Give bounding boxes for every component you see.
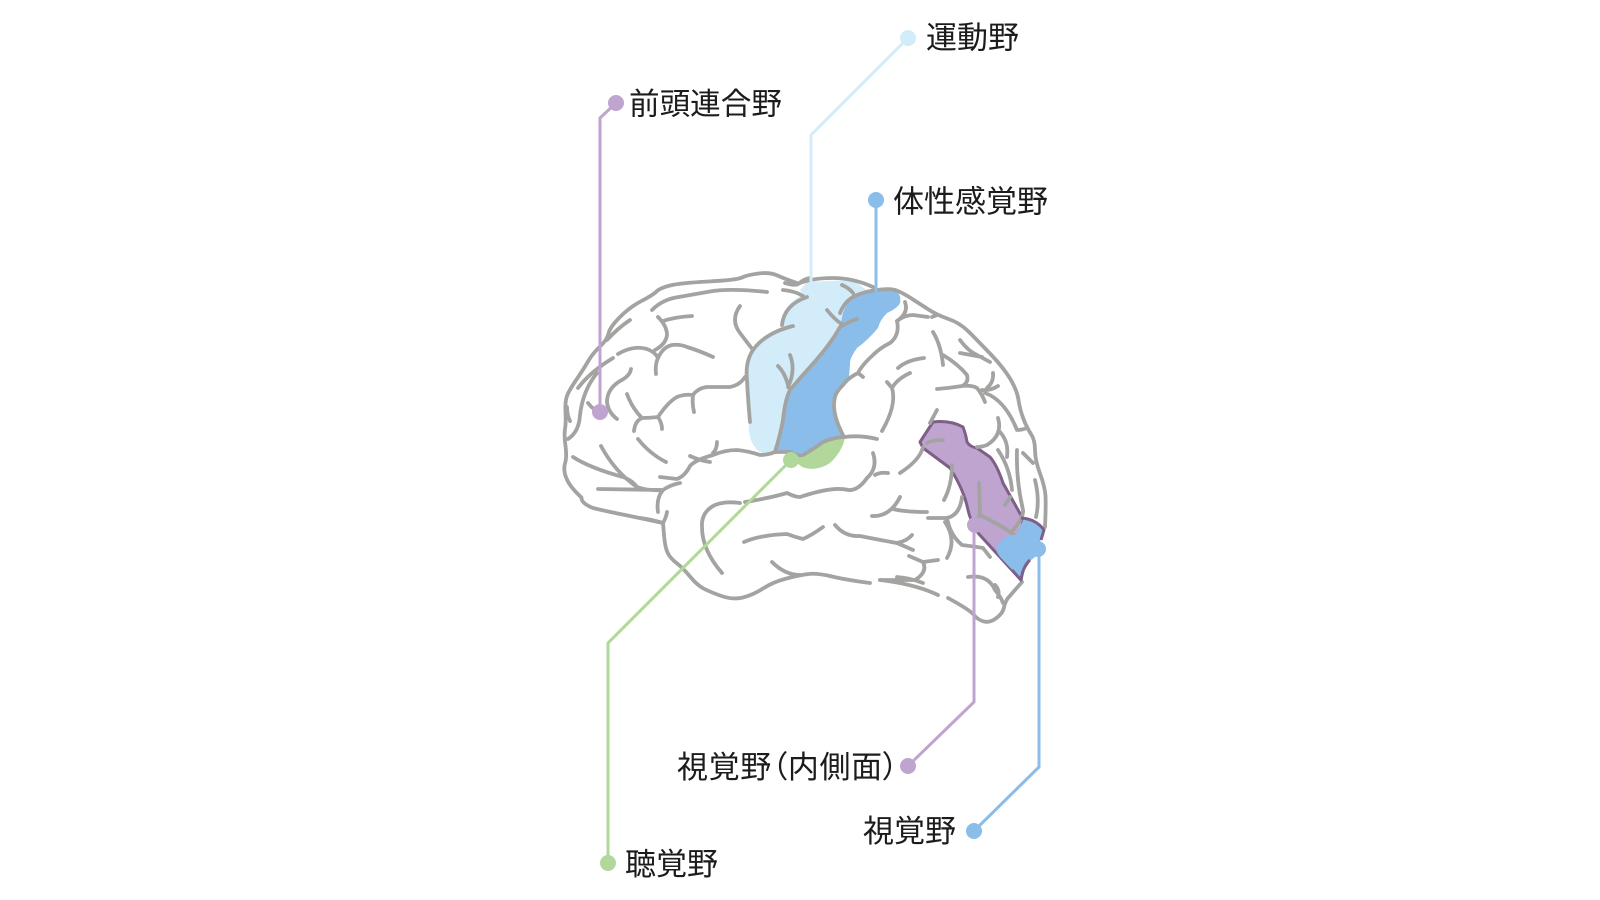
label: visual cortex bbox=[863, 541, 1046, 849]
parietal lobe sulci bbox=[897, 302, 937, 321]
label: prefrontal cortex: 前頭連合野 bbox=[629, 88, 782, 122]
central sulcus bbox=[775, 310, 857, 452]
occipital and lower sulci bbox=[900, 447, 923, 473]
label: motor cortex: 運動野 bbox=[926, 20, 1019, 56]
label: visual cortex medial: 視覚野（内側面） bbox=[677, 750, 899, 785]
region: visual cortex fill bbox=[996, 520, 1043, 578]
region: auditory cortex fill bbox=[792, 438, 845, 469]
brain outline and sulci bbox=[564, 273, 1046, 622]
label: motor cortex bbox=[811, 20, 1019, 285]
label: auditory cortex: 聴覚野 bbox=[625, 847, 718, 882]
label: somatosensory cortex: 体性感覚野 bbox=[893, 184, 1048, 220]
region: motor cortex fill bbox=[747, 280, 880, 454]
label: visual cortex medial bbox=[677, 517, 983, 785]
outer outline bbox=[564, 273, 1046, 622]
region: somatosensory cortex fill bbox=[777, 290, 900, 453]
temporal lobe sulci bbox=[745, 453, 888, 502]
visual cortex border bbox=[1012, 518, 1044, 580]
label: prefrontal cortex bbox=[592, 88, 782, 420]
label: somatosensory cortex bbox=[868, 184, 1048, 292]
label: visual cortex: 視覚野 bbox=[863, 814, 956, 849]
region: visual cortex medial fill bbox=[920, 422, 1028, 580]
frontal lobe sulci bbox=[652, 290, 767, 310]
label: auditory cortex bbox=[600, 452, 799, 882]
